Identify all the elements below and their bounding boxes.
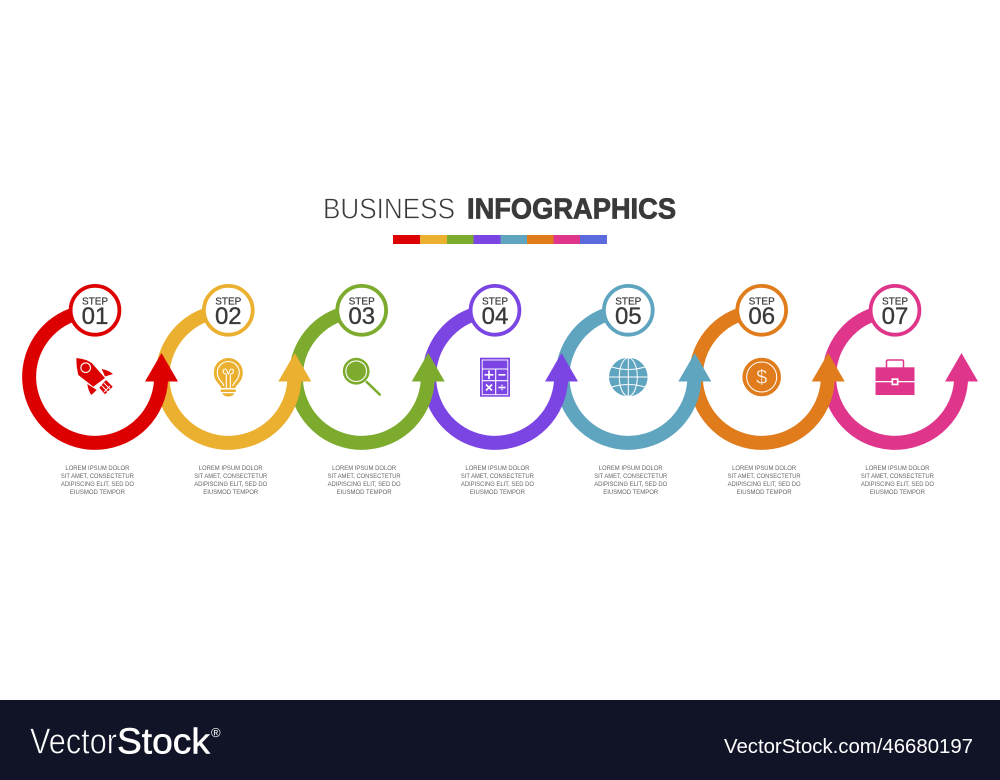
description: SIT AMET, CONSECTETUR — [61, 473, 134, 480]
description: LOREM IPSUM DOLOR — [199, 465, 263, 472]
step 04: 04 — [482, 303, 508, 330]
step 03: 03 — [348, 303, 375, 330]
description: LOREM IPSUM DOLOR — [332, 465, 396, 472]
description — [594, 465, 667, 496]
description — [728, 465, 801, 496]
step 01: 01 — [82, 303, 108, 330]
colour bar — [393, 235, 607, 244]
description — [861, 465, 934, 496]
description: EIUSMOD TEMPOR — [603, 489, 658, 496]
title: BUSINESS — [323, 194, 455, 226]
description: ADIPISCING ELIT, SED DO — [861, 481, 934, 488]
icon: calculator — [480, 358, 510, 397]
description — [194, 465, 267, 496]
step 01: STEP — [82, 296, 108, 308]
title — [323, 194, 676, 226]
step 02 — [162, 286, 311, 496]
icon: light bulb — [214, 358, 243, 396]
step 04: STEP — [482, 296, 508, 308]
icon: globe — [609, 358, 648, 396]
icon: dollar coin — [742, 358, 781, 396]
step 07: STEP — [882, 296, 908, 308]
description: ADIPISCING ELIT, SED DO — [594, 481, 667, 488]
description — [61, 465, 134, 496]
logo: Stock — [117, 720, 211, 762]
description: LOREM IPSUM DOLOR — [732, 465, 796, 472]
description: EIUSMOD TEMPOR — [337, 489, 392, 496]
description: EIUSMOD TEMPOR — [737, 489, 792, 496]
step 02: STEP — [215, 296, 242, 308]
title: INFOGRAPHICS — [467, 194, 676, 226]
description: SIT AMET, CONSECTETUR — [194, 473, 267, 480]
step 04 — [429, 286, 578, 496]
description: ADIPISCING ELIT, SED DO — [461, 481, 534, 488]
description: SIT AMET, CONSECTETUR — [861, 473, 934, 480]
description — [328, 465, 401, 496]
description: LOREM IPSUM DOLOR — [465, 465, 530, 472]
step 07: 07 — [882, 303, 908, 330]
description: EIUSMOD TEMPOR — [203, 489, 258, 496]
icon: magnifier — [343, 358, 380, 394]
logo — [30, 720, 221, 762]
description: LOREM IPSUM DOLOR — [865, 465, 930, 472]
footer band — [0, 700, 1000, 780]
step 05 — [562, 286, 711, 496]
description: LOREM IPSUM DOLOR — [65, 465, 130, 472]
image id: VectorStock.com/46680197 — [724, 736, 973, 758]
icon: rocket — [76, 358, 113, 395]
description: ADIPISCING ELIT, SED DO — [61, 481, 134, 488]
description: EIUSMOD TEMPOR — [70, 489, 125, 496]
icon: dollar coin: $ — [756, 367, 767, 389]
step 02: 02 — [215, 303, 242, 330]
logo: Vector — [30, 720, 117, 762]
description — [461, 465, 534, 496]
description: ADIPISCING ELIT, SED DO — [328, 481, 401, 488]
logo: ® — [211, 725, 221, 740]
step 06 — [696, 286, 845, 496]
description: SIT AMET, CONSECTETUR — [728, 473, 801, 480]
step 06: STEP — [749, 296, 775, 308]
step 01 — [29, 286, 178, 496]
step 03: STEP — [349, 296, 375, 308]
icon: briefcase — [876, 360, 914, 395]
step 03 — [296, 286, 445, 496]
description: ADIPISCING ELIT, SED DO — [194, 481, 267, 488]
description: ADIPISCING ELIT, SED DO — [728, 481, 801, 488]
description: SIT AMET, CONSECTETUR — [328, 473, 401, 480]
description: SIT AMET, CONSECTETUR — [594, 473, 667, 480]
step 05: 05 — [615, 303, 642, 330]
description: LOREM IPSUM DOLOR — [599, 465, 663, 472]
step 06: 06 — [748, 303, 775, 330]
step 05: STEP — [615, 296, 642, 308]
description: EIUSMOD TEMPOR — [870, 489, 925, 496]
description: SIT AMET, CONSECTETUR — [461, 473, 534, 480]
description: EIUSMOD TEMPOR — [470, 489, 525, 496]
step 07 — [829, 286, 978, 496]
